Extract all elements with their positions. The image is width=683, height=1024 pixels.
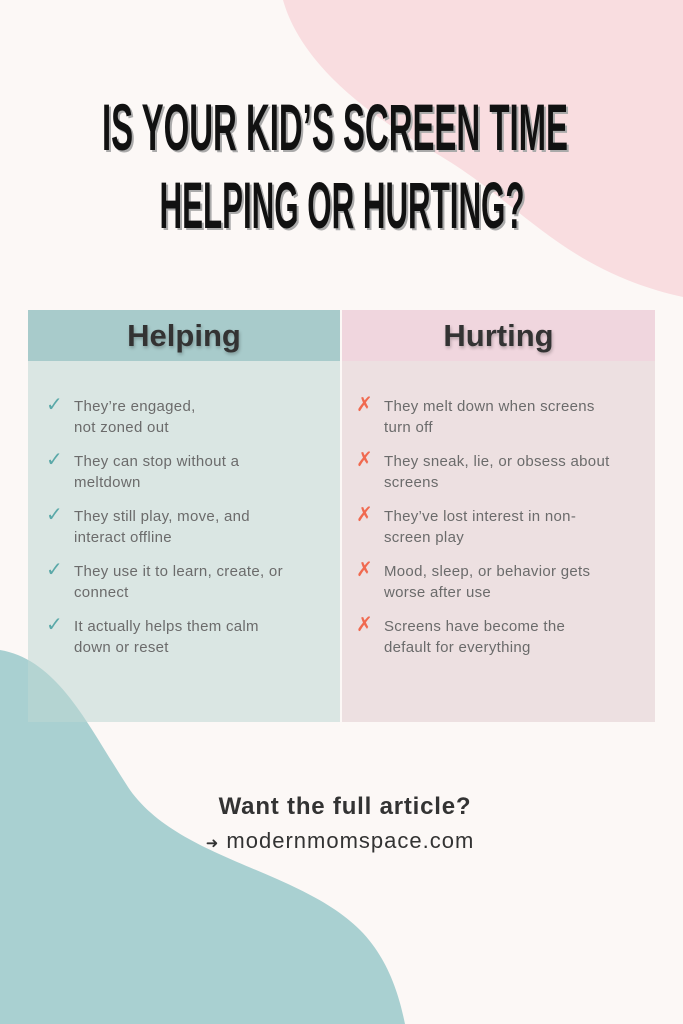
list: helping items: not zoned out [74, 419, 169, 436]
blob: pink top-right [283, 0, 683, 297]
heading: hurting: Hurting [443, 318, 554, 353]
panel: hurting: ✗ [356, 559, 373, 581]
call to action: ➜ modernmomspace.com [206, 828, 474, 853]
list: hurting items [356, 394, 610, 656]
list: helping items: They still play, move, and interact offline [74, 508, 250, 546]
heading: helping: Helping [127, 318, 241, 353]
list: helping items: They can stop without a meltdown [74, 453, 239, 491]
call to action [206, 793, 474, 853]
list: hurting items: They sneak, lie, or obsess about screens [384, 453, 610, 491]
list: helping items [46, 394, 283, 656]
list: hurting items: They’ve lost interest in non- [384, 508, 576, 525]
title [102, 90, 570, 244]
panel: helping: ✓ [46, 559, 63, 581]
call to action: Want the full article? [219, 793, 471, 820]
panel: hurting: ✗ [356, 614, 373, 636]
panel: helping: ✓ [46, 449, 63, 471]
list: hurting items: default for everything [384, 639, 531, 656]
panel: helping [28, 310, 340, 722]
panel: hurting: ✗ [356, 504, 373, 526]
list: helping items: They’re engaged, [74, 398, 196, 415]
panel: helping: ✓ [46, 504, 63, 526]
blob: teal bottom-left [0, 650, 405, 1024]
list: helping items: It actually helps them calm down or reset [74, 618, 259, 656]
list: hurting items: They melt down when screens turn off [384, 398, 595, 436]
panel: hurting: ✗ [356, 449, 373, 471]
list: hurting items: screen play [384, 529, 464, 546]
panel: hurting: ✗ [356, 394, 373, 416]
list: helping items: They use it to learn, create, or connect [74, 563, 283, 601]
list: hurting items: Screens have become the [384, 618, 565, 635]
panel: hurting [342, 310, 655, 722]
heading: helping [28, 310, 340, 361]
panel: helping: ✓ [46, 394, 63, 416]
list: hurting items: Mood, sleep, or behavior gets worse after use [384, 563, 590, 601]
panel: helping: ✓ [46, 614, 63, 636]
heading: hurting [342, 310, 655, 361]
